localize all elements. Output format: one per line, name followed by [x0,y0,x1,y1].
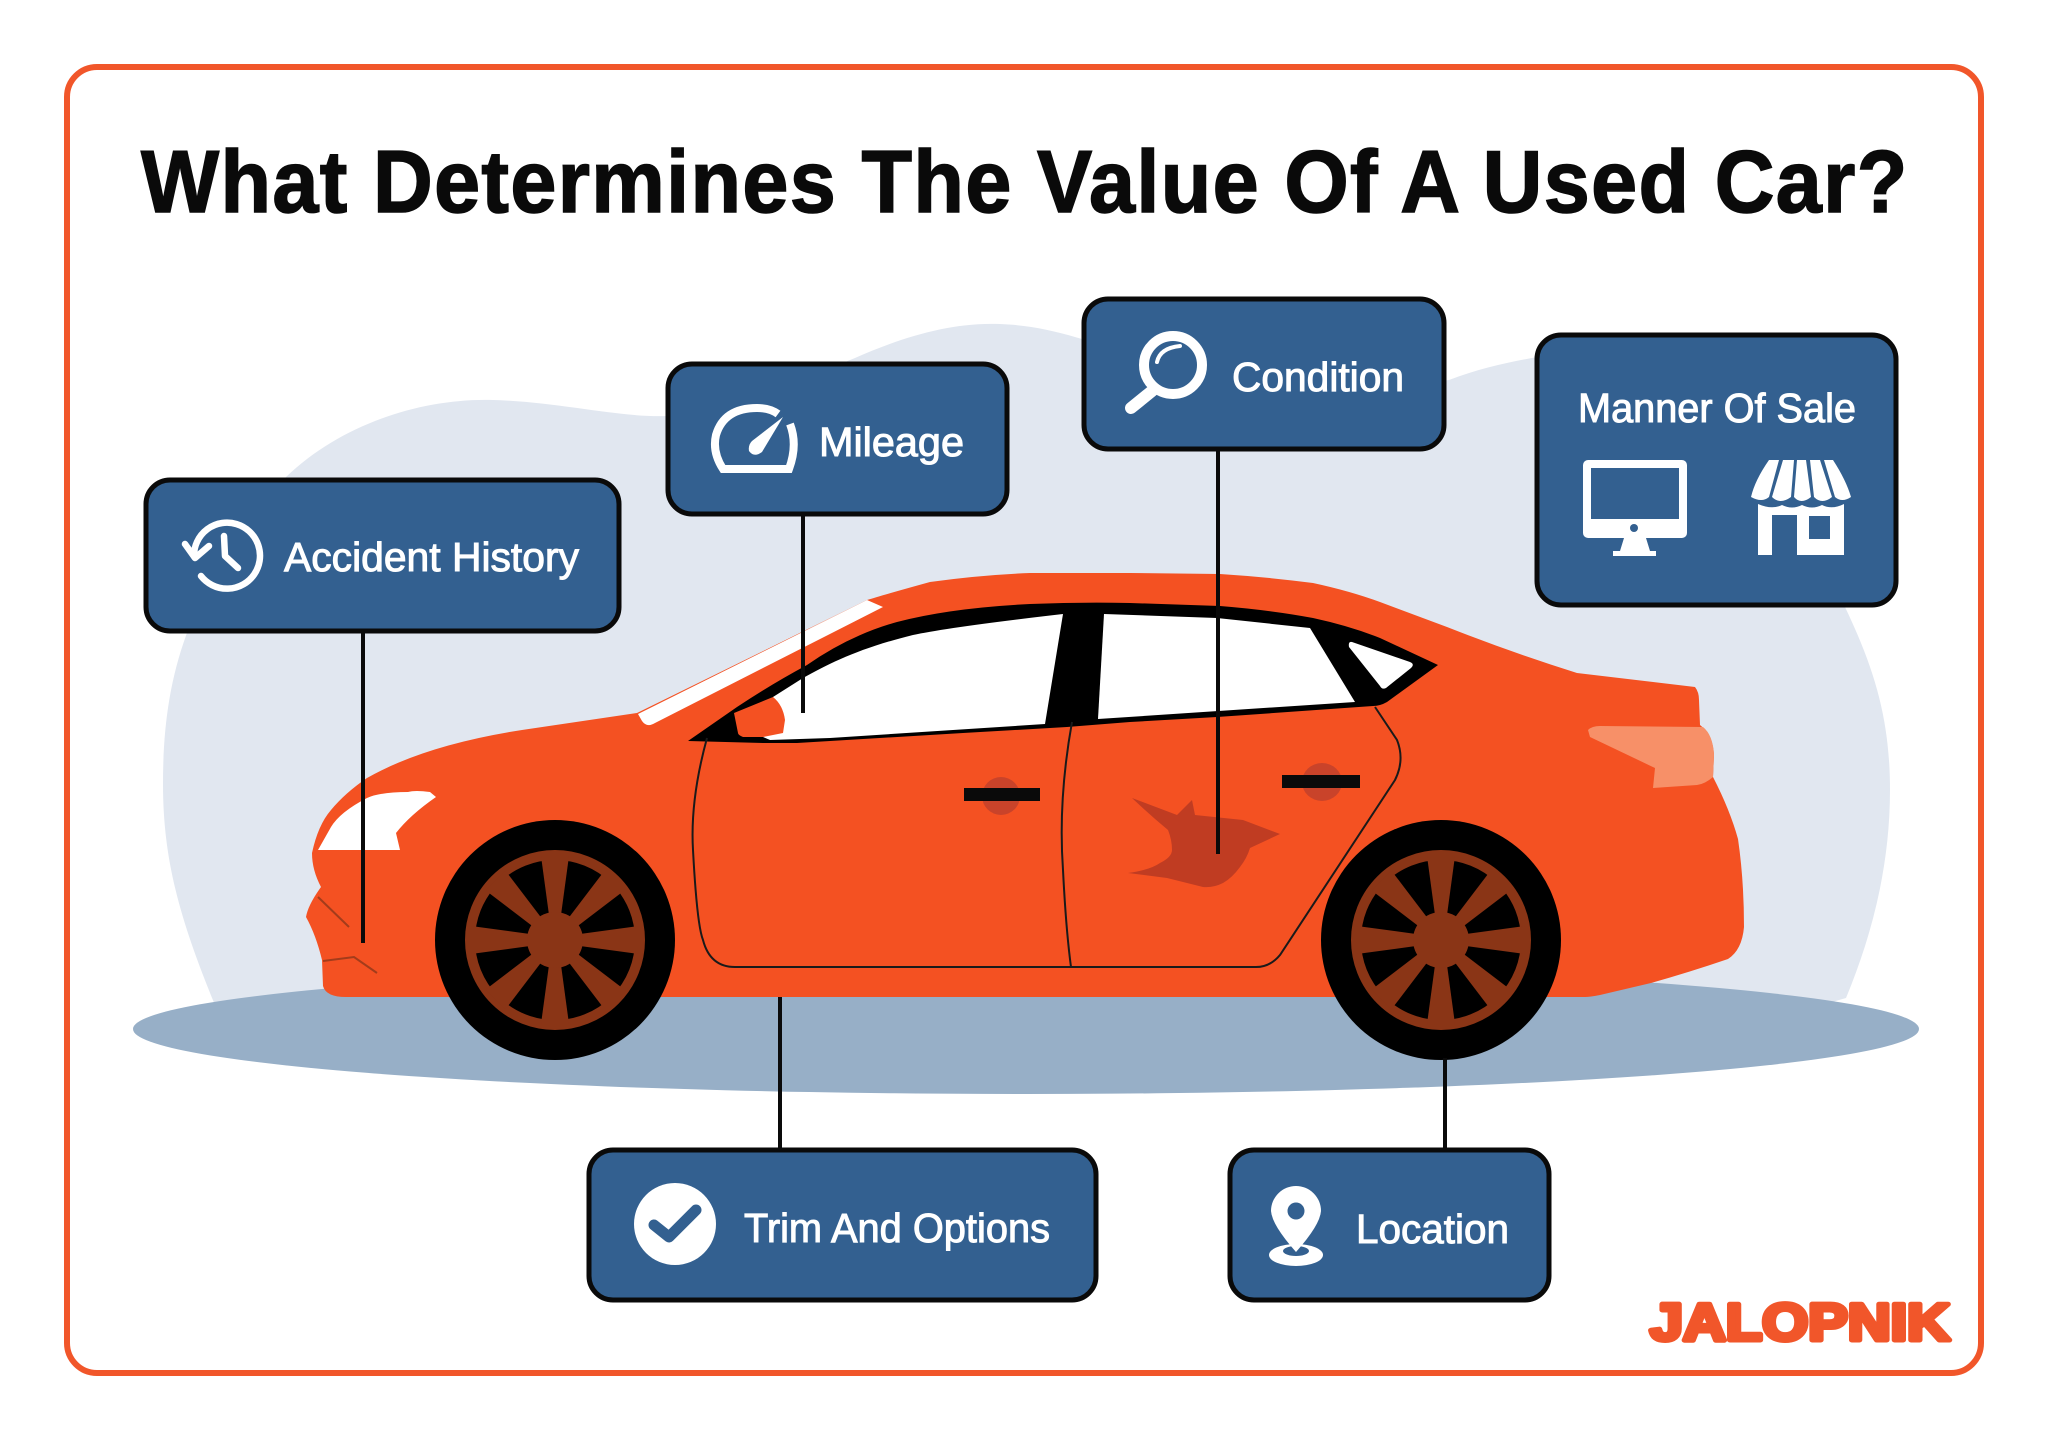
connector: condition [1216,449,1220,854]
connector: trim and options [778,997,782,1150]
panel: trim and options [589,1150,1096,1300]
door lines [693,707,1401,967]
car [306,573,1744,1060]
label: manner of sale: Manner Of Sale [1578,385,1856,431]
ground shadow [133,964,1919,1094]
connector: mileage [801,514,805,713]
label: trim and options: Trim And Options [744,1205,1050,1251]
panel: location [1230,1150,1549,1300]
panel: condition [1084,299,1444,449]
label: location: Location [1356,1206,1509,1252]
icon: speedometer [715,408,794,469]
icon: check mark [634,1183,716,1265]
quarter window [1349,642,1413,689]
windshield highlight [638,600,883,725]
front wheel [435,820,675,1060]
connector: location [1443,1058,1447,1150]
car body [306,573,1744,997]
front window [763,614,1063,740]
connector: accident history [361,631,365,943]
window frame [688,603,1438,743]
door handle front [964,777,1040,815]
headlight [318,791,436,850]
rear wheel [1321,820,1561,1060]
icon: history clock [185,523,260,589]
panel: mileage [668,364,1007,514]
rear window [1098,614,1355,719]
background blob [163,324,1890,1040]
icon: map pin [1269,1186,1323,1266]
label: mileage: Mileage [819,419,964,465]
title: What Determines The Value Of A Used Car? [141,134,1907,232]
icon: magnifying glass [1131,336,1202,408]
bumper cracks [318,897,377,973]
taillight [1588,726,1714,788]
logo: jalopnik: JALOPNIK [1650,1294,1951,1352]
side mirror [734,697,785,737]
icon: computer monitor [1583,460,1687,556]
door handle rear [1282,763,1360,801]
label: accident history: Accident History [284,534,579,580]
dent [1128,798,1280,887]
panel: manner of sale [1537,335,1896,605]
panel: accident history [146,480,619,631]
label: condition: Condition [1232,354,1404,400]
icon: storefront [1751,460,1851,555]
